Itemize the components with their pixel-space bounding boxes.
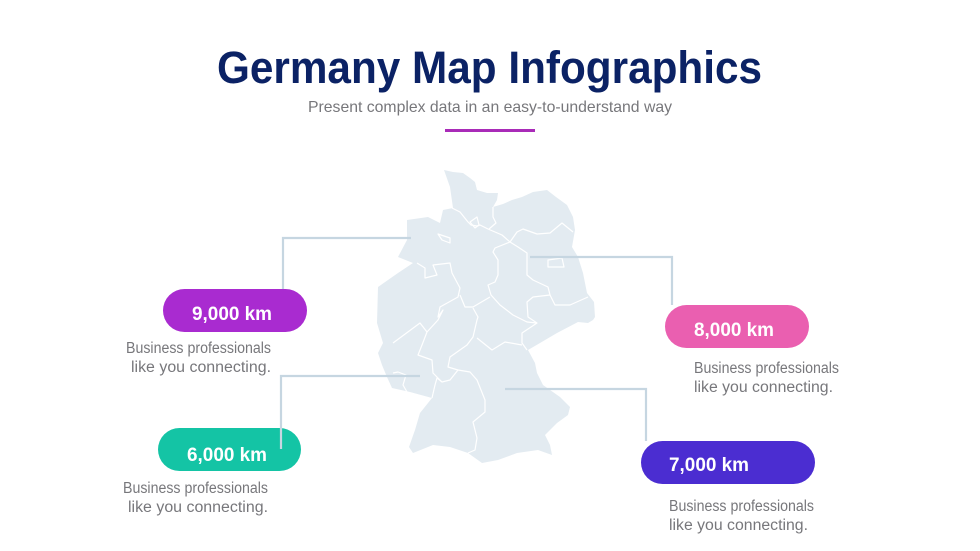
pill: 9,000 km <box>163 289 307 332</box>
subtitle: Present complex data in an easy-to-understand way <box>308 99 672 116</box>
pill: 6,000 km <box>158 428 301 471</box>
pill: 7,000 km <box>641 441 815 484</box>
connector: 7,000 km <box>505 389 646 441</box>
text: 7,000 km description: like you connecting. <box>669 517 808 534</box>
pill: 9,000 km: 9,000 km <box>192 304 272 325</box>
map of Germany <box>377 170 595 463</box>
text: 6,000 km description: like you connecting. <box>128 499 268 516</box>
pill: 7,000 km: 7,000 km <box>669 455 749 476</box>
text: 7,000 km description: Business professionals <box>669 498 814 515</box>
text: 8,000 km description: Business professionals <box>694 360 839 377</box>
connector: 9,000 km <box>283 238 411 289</box>
text: 7,000 km description <box>669 498 814 534</box>
title underline <box>445 129 535 132</box>
text: 8,000 km description: like you connecting. <box>694 379 833 396</box>
text: 8,000 km description <box>694 360 839 396</box>
text: 6,000 km description <box>123 480 268 516</box>
pill: 8,000 km: 8,000 km <box>694 320 774 341</box>
state borders <box>393 207 588 453</box>
title: Germany Map Infographics <box>217 42 762 93</box>
text: 9,000 km description: Business professionals <box>126 340 271 357</box>
pill: 6,000 km: 6,000 km <box>187 445 267 466</box>
text: 6,000 km description: Business professionals <box>123 480 268 497</box>
pill: 8,000 km <box>665 305 809 348</box>
connector: 8,000 km <box>530 257 672 305</box>
text: 9,000 km description <box>126 340 271 376</box>
text: 9,000 km description: like you connecting. <box>131 359 271 376</box>
connector: 6,000 km <box>281 376 420 449</box>
